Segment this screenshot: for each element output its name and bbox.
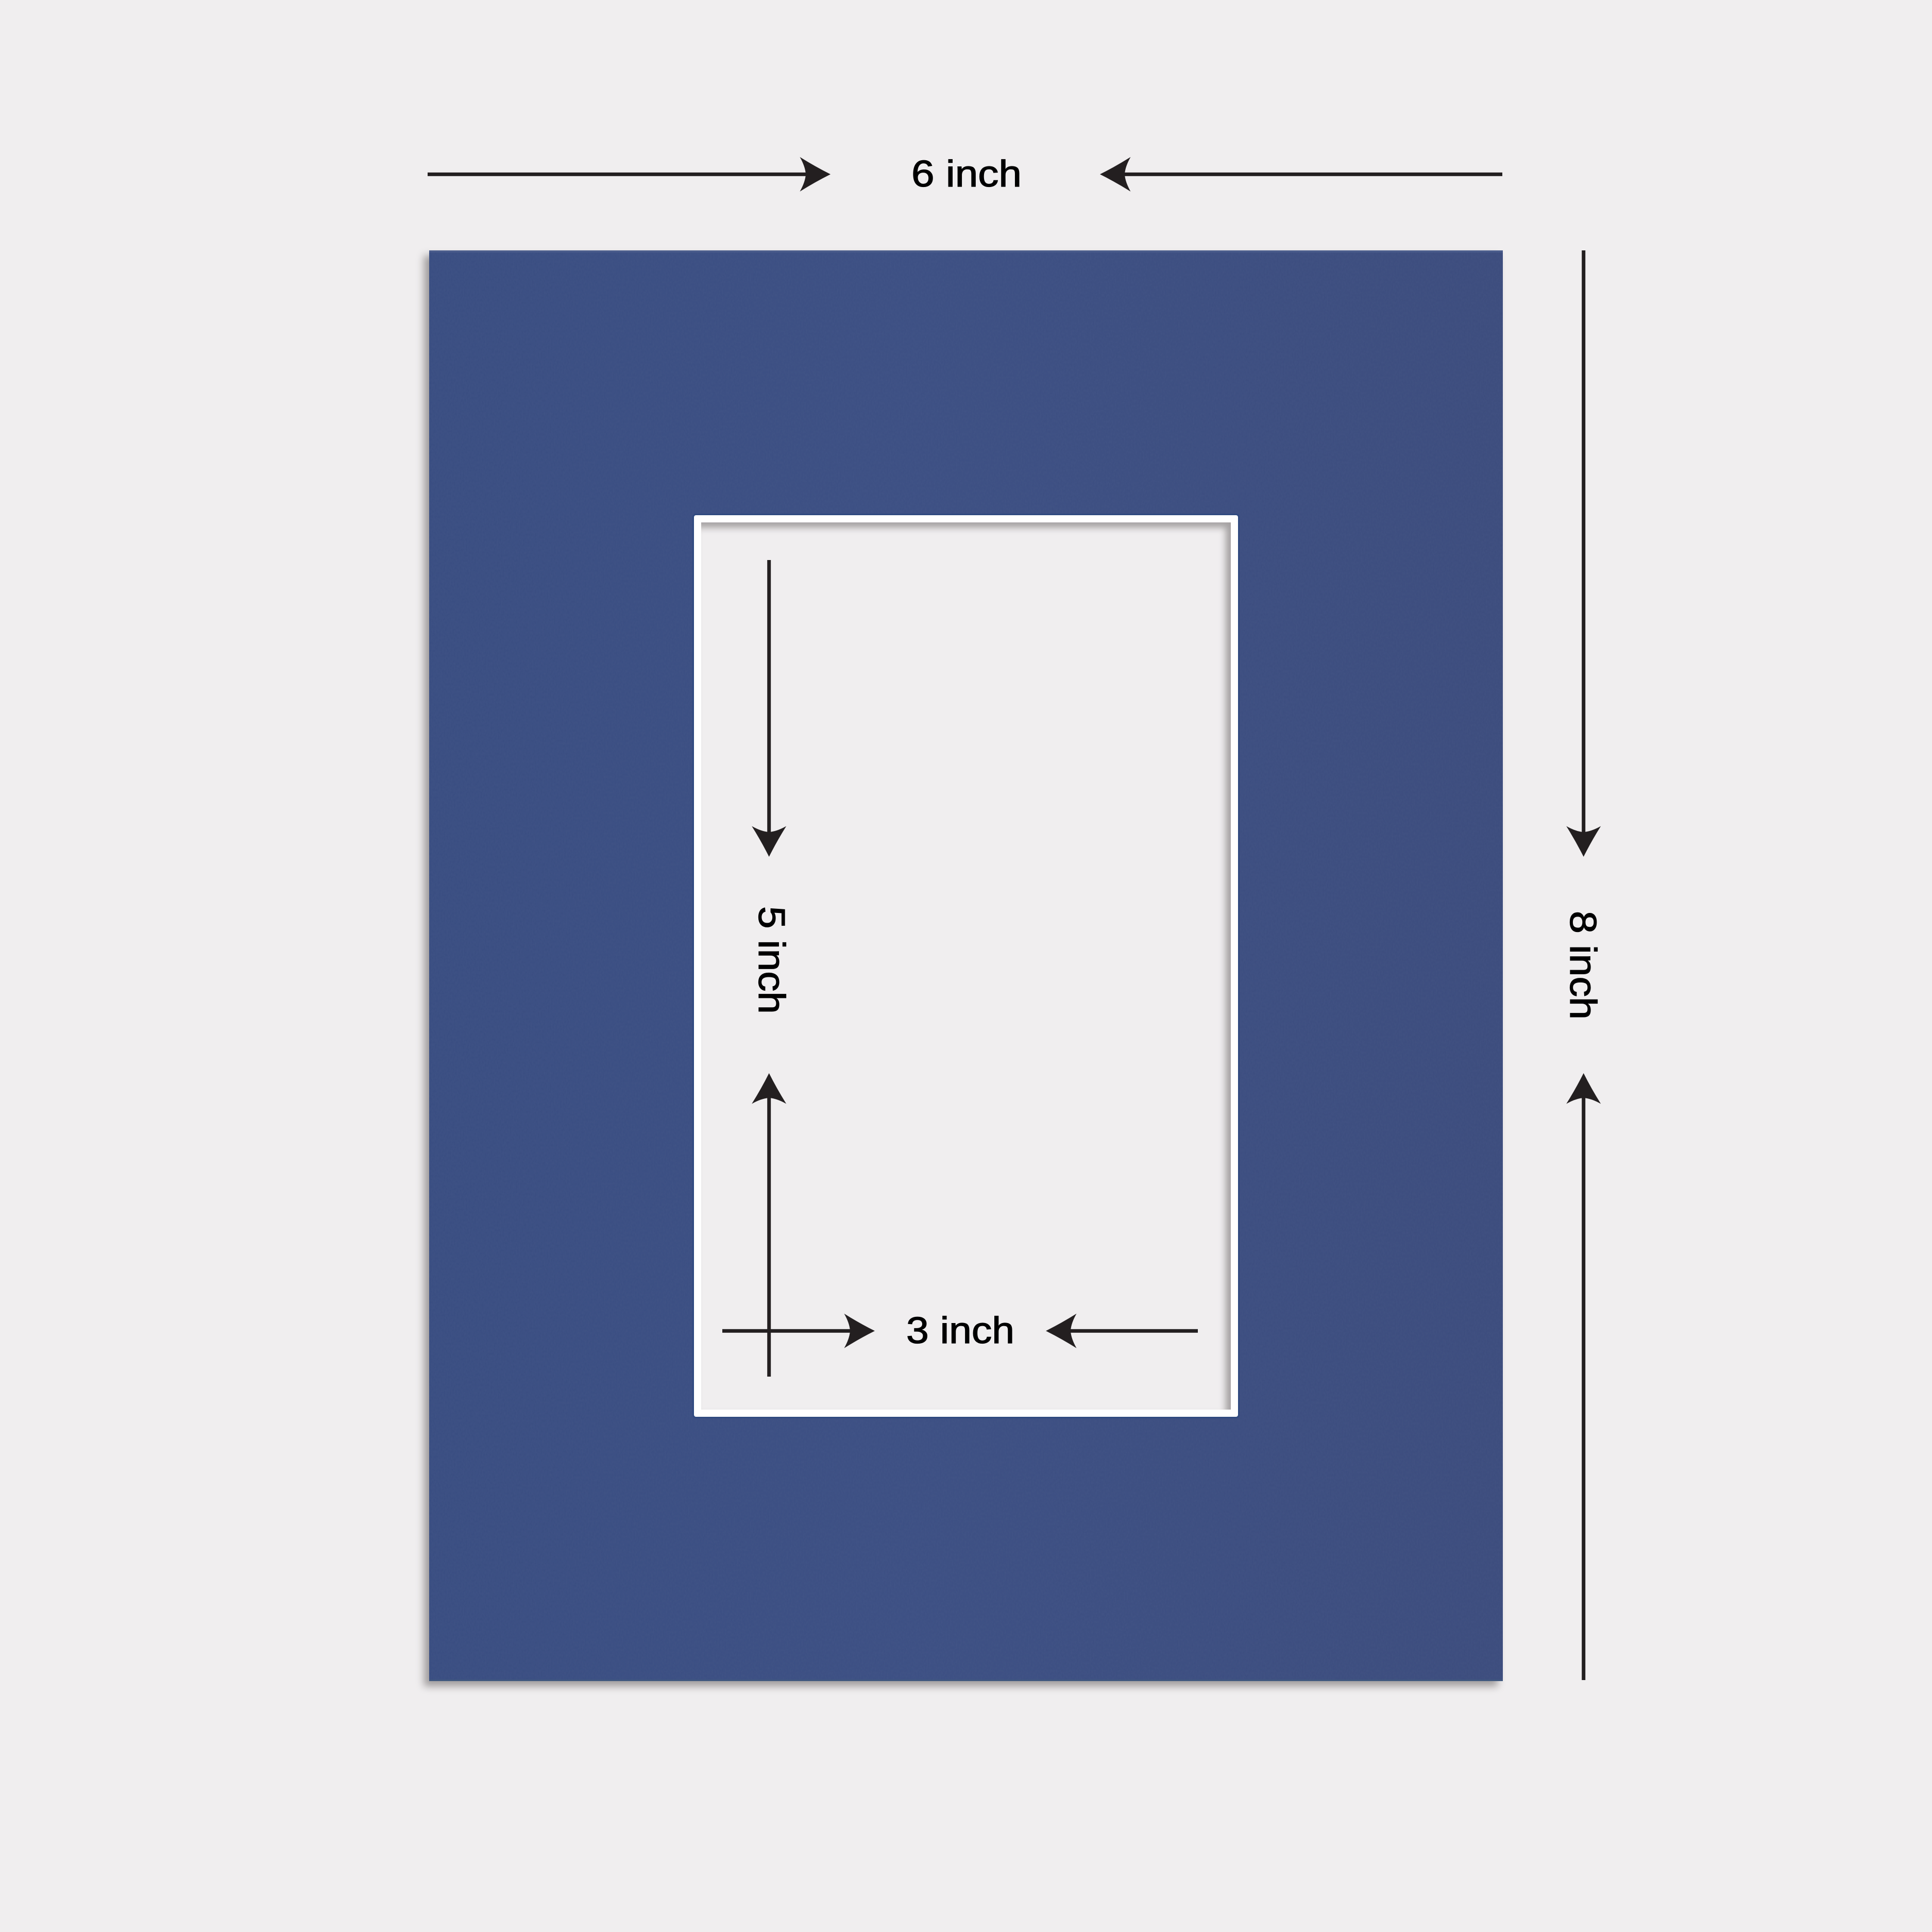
arrow: 6 inch width, left side: [428, 157, 831, 192]
arrow: 5 inch height, bottom side: [752, 1073, 786, 1377]
window opening with inner shadow: [701, 522, 1231, 1410]
panel: navy mat board: [429, 250, 1503, 1681]
label: 5 inch: 5 inch: [751, 906, 792, 1014]
arrow: 3 inch width, right side: [1046, 1314, 1198, 1348]
arrow: 8 inch height, bottom side: [1566, 1073, 1601, 1680]
arrow: 5 inch height, top side: [752, 560, 786, 857]
arrow: 3 inch width, left side: [722, 1314, 875, 1348]
arrow: 8 inch height, top side: [1566, 250, 1601, 857]
label: 3 inch: 3 inch: [906, 1310, 1014, 1351]
label: 6 inch: 6 inch: [911, 154, 1022, 195]
arrow: 6 inch width, right side: [1100, 157, 1502, 192]
label: 8 inch: 8 inch: [1562, 911, 1603, 1020]
window: white bevelled cut-out: [694, 515, 1238, 1417]
